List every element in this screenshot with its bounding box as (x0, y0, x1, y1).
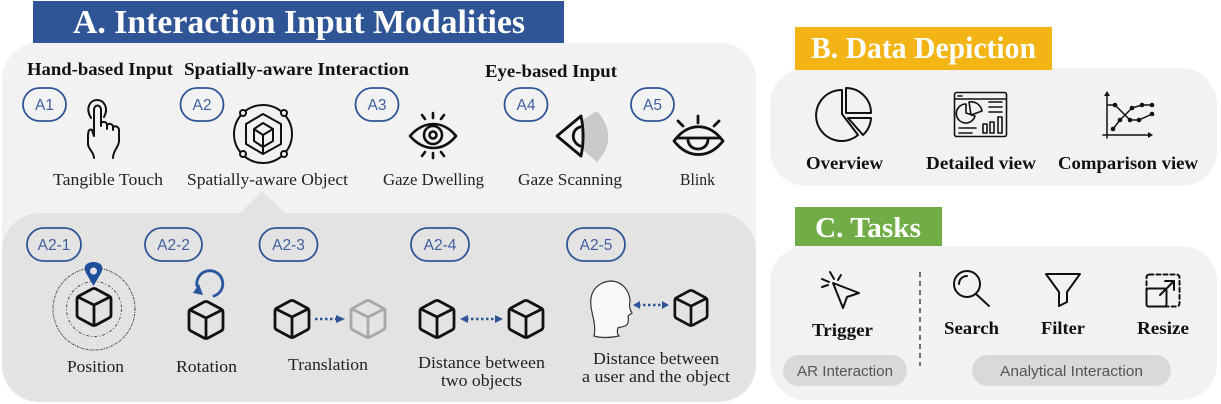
badge A2-2 (145, 228, 202, 261)
icon: rotation (189, 271, 223, 338)
label: blink: Blink (680, 170, 715, 189)
heading: spatially-aware interaction: Spatially-aware Interaction (184, 59, 409, 79)
icon: distance between two objects (420, 300, 543, 338)
label: distance between a user and the object: a user and the object (582, 367, 730, 386)
title C (795, 207, 942, 246)
label: translation: Translation (288, 355, 369, 374)
label: detailed view: Detailed view (926, 153, 1036, 173)
badge A5: A5 (643, 97, 662, 114)
badge A3 (356, 88, 398, 121)
label: resize: Resize (1137, 318, 1189, 338)
panel: A. Interaction Input Modalities (2, 43, 756, 402)
label: distance between two objects: two objects (441, 371, 522, 390)
label: rotation: Rotation (176, 357, 238, 376)
icon: gaze scanning (557, 111, 608, 162)
badge A2-2: A2-2 (157, 237, 190, 254)
tag: AR interaction: AR Interaction (797, 363, 893, 380)
badge A5 (631, 88, 674, 121)
badge A2-1: A2-1 (38, 237, 70, 254)
badge A2-5: A2-5 (580, 237, 612, 254)
icon: comparison view line chart (1103, 91, 1154, 138)
icon: distance between user and object (591, 281, 707, 338)
badge A2-3 (260, 228, 318, 261)
label: filter: Filter (1041, 318, 1085, 338)
label: distance between two objects: Distance between (418, 353, 546, 372)
icon: translation (275, 300, 385, 338)
label: distance between two objects (418, 353, 546, 390)
label: distance between a user and the object (582, 349, 730, 386)
label: tangible touch: Tangible Touch (53, 170, 164, 189)
label: overview: Overview (806, 153, 883, 173)
title C: C. Tasks (815, 212, 921, 244)
icon: trigger cursor (822, 272, 859, 308)
label: gaze scanning: Gaze Scanning (518, 170, 623, 189)
icon: position (53, 262, 135, 350)
badge A4 (504, 88, 548, 121)
label: position: Position (67, 357, 125, 376)
tag: analytical interaction: Analytical Interaction (1000, 363, 1143, 380)
badge A2-4 (411, 228, 469, 261)
icon: spatially-aware object (234, 105, 292, 163)
badge A1: A1 (35, 97, 54, 114)
badge A2: A2 (193, 97, 211, 114)
label: distance between a user and the object: Distance between (593, 349, 720, 368)
title A: A. Interaction Input Modalities (73, 4, 525, 41)
icon: detailed view dashboard (954, 92, 1006, 136)
icon: tangible touch (88, 100, 119, 158)
heading: hand-based input: Hand-based Input (27, 59, 173, 79)
icon: blink (674, 116, 723, 154)
badge A1 (23, 88, 66, 121)
badge A2-3: A2-3 (272, 237, 305, 254)
badge A2 (180, 88, 224, 121)
label: gaze dwelling: Gaze Dwelling (383, 170, 484, 189)
label: spatially-aware object: Spatially-aware Object (187, 170, 348, 189)
badge A4: A4 (517, 97, 536, 114)
label: comparison view: Comparison view (1058, 153, 1198, 173)
icon: resize (1146, 274, 1180, 306)
panel: C. Tasks (770, 246, 1217, 400)
tag: AR interaction (783, 355, 907, 386)
panel: A2 sub-modalities (2, 191, 756, 402)
icon: filter (1046, 274, 1080, 306)
icon: gaze dwelling (410, 113, 456, 158)
label: trigger: Trigger (812, 320, 873, 340)
icon: search (954, 271, 989, 306)
label: search: Search (944, 318, 999, 338)
icon: overview pie chart (816, 88, 871, 141)
badge A3: A3 (368, 97, 386, 114)
badge A2-4: A2-4 (424, 237, 457, 254)
panel: B. Data Depiction (770, 68, 1217, 186)
heading: eye-based input: Eye-based Input (485, 61, 617, 81)
badge A2-1 (27, 228, 81, 261)
badge A2-5 (567, 228, 625, 261)
tag: analytical interaction (972, 355, 1171, 386)
title B: B. Data Depiction (811, 30, 1036, 65)
